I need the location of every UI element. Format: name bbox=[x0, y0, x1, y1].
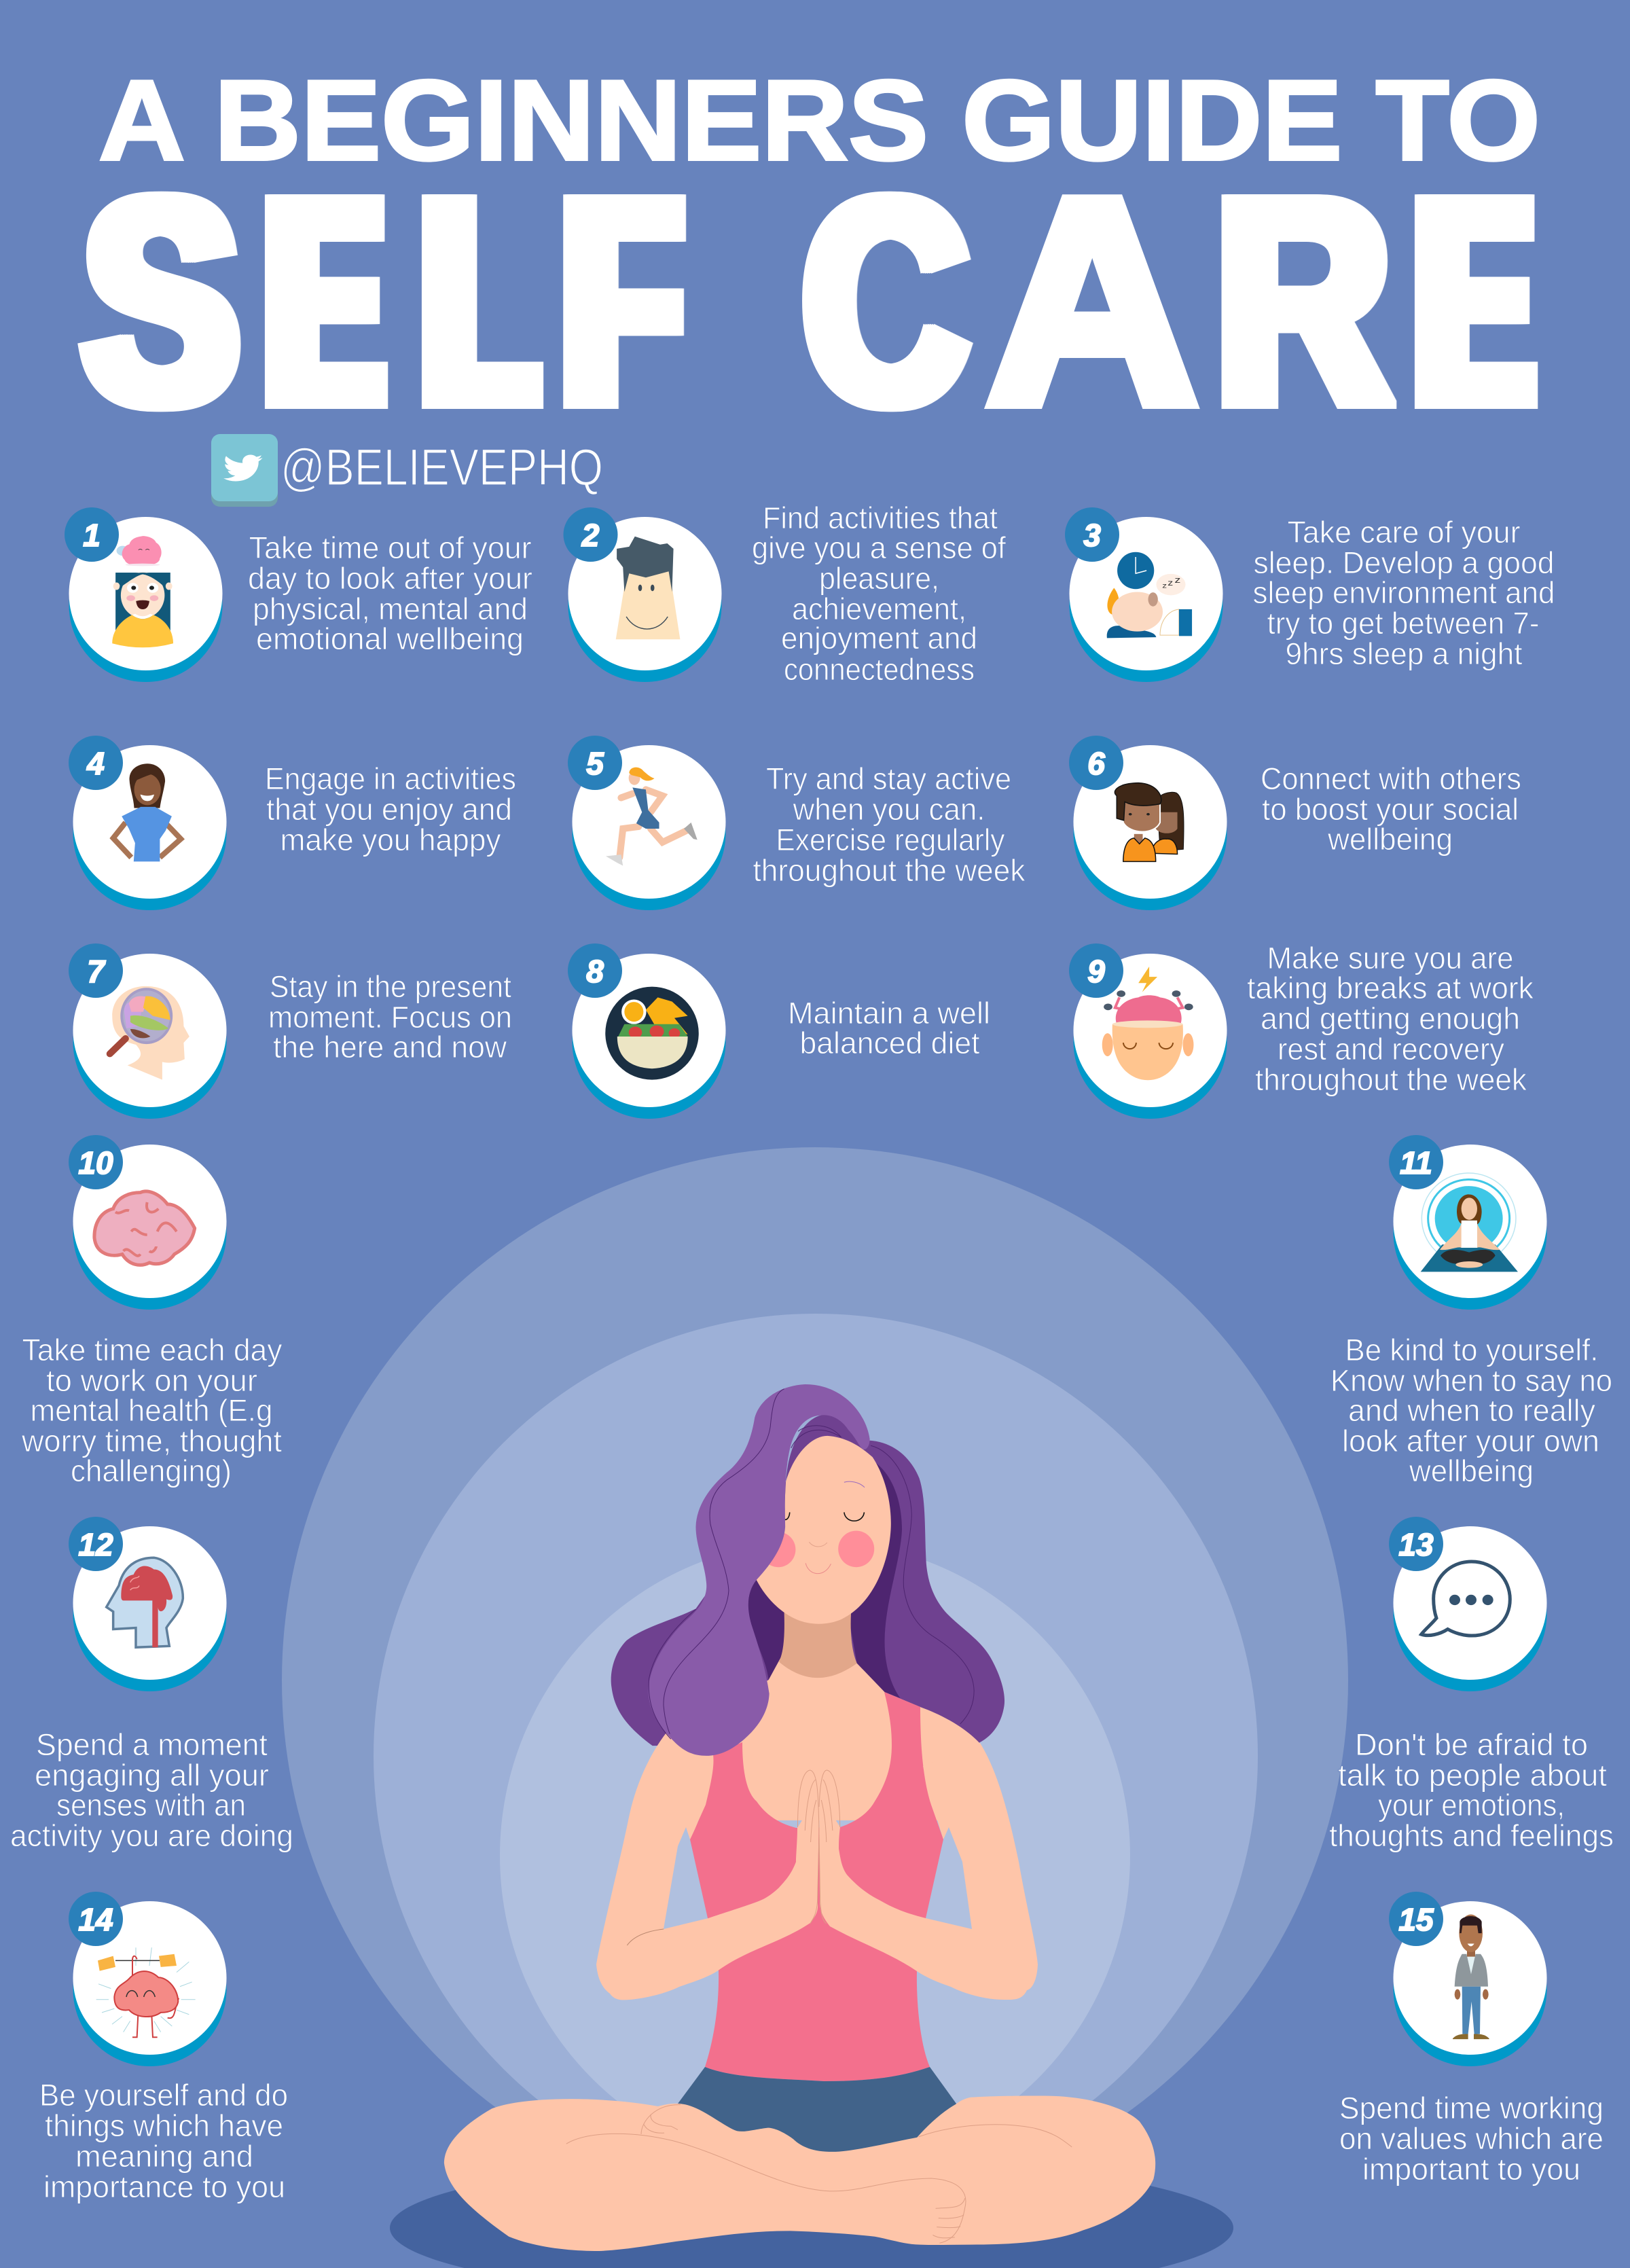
text bbox=[788, 996, 990, 1060]
tip 15 bbox=[1339, 1892, 1604, 2186]
text: Engage in activities bbox=[265, 761, 516, 796]
text: talk to people about bbox=[1338, 1758, 1607, 1793]
text: Take time out of your bbox=[249, 530, 532, 565]
text: and when to really bbox=[1348, 1393, 1595, 1428]
heading: self care: E bbox=[258, 139, 367, 463]
text bbox=[21, 1333, 283, 1488]
text: and getting enough bbox=[1261, 1001, 1520, 1036]
text: that you enjoy and bbox=[266, 792, 512, 827]
icon circle bbox=[69, 517, 223, 682]
badge number 1: 1 bbox=[83, 518, 101, 553]
icon: two friends bbox=[1115, 783, 1184, 861]
background concentric circles bbox=[282, 1147, 1348, 2214]
heading: self care: L bbox=[414, 139, 524, 463]
text: mental health (E.g bbox=[30, 1393, 273, 1428]
heading: self care: E bbox=[1408, 139, 1517, 463]
badge number 14 bbox=[69, 1892, 123, 1946]
icon circle bbox=[73, 1901, 227, 2066]
text: senses with an bbox=[56, 1788, 246, 1822]
tip 3 bbox=[1065, 507, 1555, 682]
icon: runner bbox=[606, 768, 698, 865]
badge number 4 bbox=[69, 736, 123, 790]
tip 6 bbox=[1069, 736, 1521, 910]
tip 4 bbox=[69, 736, 516, 910]
text: make you happy bbox=[280, 823, 501, 857]
icon circle bbox=[568, 517, 721, 682]
badge number 7: 7 bbox=[87, 954, 106, 989]
text bbox=[10, 1727, 293, 1853]
badge number 14: 14 bbox=[78, 1902, 113, 1937]
badge number 7 bbox=[69, 943, 123, 998]
text bbox=[1339, 2091, 1604, 2186]
shorts bbox=[678, 2067, 956, 2160]
badge number 15: 15 bbox=[1398, 1902, 1434, 1937]
icon circle bbox=[1394, 1145, 1547, 1310]
text: physical, mental and bbox=[253, 592, 528, 626]
text: the here and now bbox=[273, 1030, 507, 1064]
text: your emotions, bbox=[1378, 1788, 1565, 1822]
text: give you a sense of bbox=[752, 530, 1006, 565]
icon: speech bubble bbox=[1421, 1562, 1510, 1636]
badge number 3 bbox=[1065, 507, 1119, 562]
text: connectedness bbox=[784, 652, 975, 687]
text: Try and stay active bbox=[766, 761, 1011, 796]
icon: brain lifting weights bbox=[96, 1947, 196, 2037]
text: try to get between 7- bbox=[1267, 606, 1539, 641]
text: Spend time working bbox=[1339, 2091, 1604, 2125]
icon: sleeping person with clock: z bbox=[1175, 575, 1180, 586]
text: rest and recovery bbox=[1278, 1032, 1504, 1066]
badge number 2 bbox=[564, 507, 618, 562]
icon: standing man bbox=[1453, 1914, 1489, 2039]
icon circle bbox=[1073, 745, 1227, 910]
badge number 13: 13 bbox=[1398, 1527, 1434, 1562]
text: thoughts and feelings bbox=[1329, 1818, 1614, 1853]
text: Be yourself and do bbox=[39, 2078, 288, 2112]
right arm bbox=[819, 1743, 1038, 2000]
tip 2 bbox=[564, 501, 1006, 687]
badge number 5 bbox=[568, 736, 622, 790]
icon: meditating figure bbox=[1421, 1173, 1518, 1272]
text: challenging) bbox=[71, 1454, 232, 1488]
icon: girl with brain bbox=[112, 536, 173, 647]
icon: food plate bbox=[605, 987, 699, 1080]
badge number 8 bbox=[568, 943, 622, 998]
text: Spend a moment bbox=[36, 1727, 268, 1762]
text: engaging all your bbox=[35, 1758, 269, 1793]
text: Take care of your bbox=[1288, 515, 1521, 550]
tip 12 bbox=[10, 1517, 293, 1853]
icon circle bbox=[73, 1526, 227, 1691]
text: throughout the week bbox=[753, 853, 1026, 888]
badge number 12: 12 bbox=[78, 1527, 113, 1562]
icon: sleeping person with clock: z bbox=[1167, 579, 1173, 588]
text: emotional wellbeing bbox=[256, 622, 524, 656]
left arm bbox=[596, 1733, 819, 2000]
text: importance to you bbox=[43, 2170, 285, 2204]
text bbox=[753, 761, 1026, 888]
badge number 11 bbox=[1389, 1135, 1443, 1189]
icon: brain bbox=[94, 1191, 195, 1265]
text: day to look after your bbox=[248, 561, 532, 596]
heading: self care bbox=[77, 139, 1538, 463]
text: Know when to say no bbox=[1330, 1363, 1612, 1398]
badge number 6: 6 bbox=[1087, 746, 1105, 781]
text: pleasure, bbox=[819, 561, 939, 596]
badge number 12 bbox=[69, 1517, 123, 1571]
tip 13 bbox=[1329, 1517, 1614, 1853]
tip 9 bbox=[1069, 941, 1534, 1119]
badge number 8: 8 bbox=[586, 954, 604, 989]
badge number 6 bbox=[1069, 736, 1123, 790]
icon: smiling man bbox=[616, 537, 680, 639]
badge number 4: 4 bbox=[86, 746, 105, 781]
text bbox=[268, 969, 512, 1064]
badge number 13 bbox=[1389, 1517, 1443, 1571]
text: sleep environment and bbox=[1252, 575, 1555, 610]
text: taking breaks at work bbox=[1247, 971, 1534, 1005]
text bbox=[752, 501, 1006, 687]
text bbox=[39, 2078, 288, 2204]
tip 11 bbox=[1330, 1135, 1612, 1488]
icon: sleeping person with clock bbox=[1107, 552, 1192, 638]
crossed legs and finger lines bbox=[444, 2095, 1155, 2251]
tip 14 bbox=[39, 1892, 288, 2204]
icon circle bbox=[73, 954, 227, 1119]
text: activity you are doing bbox=[10, 1818, 293, 1853]
front hair bbox=[648, 1384, 870, 1756]
text: to boost your social bbox=[1262, 792, 1519, 827]
pink tank top bbox=[690, 1692, 943, 2081]
text: wellbeing bbox=[1327, 822, 1453, 857]
tip 10 bbox=[21, 1135, 283, 1488]
text: Be kind to yourself. bbox=[1345, 1333, 1599, 1367]
badge number 11: 11 bbox=[1400, 1145, 1432, 1181]
text: Exercise regularly bbox=[776, 823, 1005, 857]
icon: happy woman bbox=[113, 763, 181, 861]
text: important to you bbox=[1362, 2152, 1580, 2186]
icon: head with lifting brain bbox=[1102, 967, 1193, 1080]
text: Take time each day bbox=[22, 1333, 283, 1367]
text: Stay in the present bbox=[270, 969, 511, 1004]
badge number 15 bbox=[1389, 1892, 1443, 1946]
heading: self care: S bbox=[77, 139, 231, 463]
text: things which have bbox=[45, 2108, 283, 2143]
icon: sleeping person with clock: z bbox=[1162, 581, 1167, 590]
tip 8 bbox=[568, 943, 990, 1119]
twitter handle: @BELIEVEPHQ bbox=[280, 439, 603, 497]
text: sleep. Develop a good bbox=[1254, 545, 1554, 580]
hands finger lines bbox=[627, 1770, 840, 1945]
text bbox=[1261, 761, 1521, 857]
icon: twitter badge bbox=[211, 434, 278, 507]
back hair bbox=[611, 1415, 1004, 1746]
icon circle bbox=[73, 745, 227, 910]
text: 9hrs sleep a night bbox=[1285, 636, 1523, 671]
heading: a beginners guide to: A BEGINNERS GUIDE TO bbox=[98, 56, 1540, 184]
text: when you can. bbox=[793, 792, 985, 827]
text: Maintain a well bbox=[788, 996, 990, 1030]
text: moment. Focus on bbox=[268, 1000, 512, 1034]
illustration: meditating woman bbox=[444, 1384, 1155, 2251]
badge number 1 bbox=[65, 507, 119, 562]
text: enjoyment and bbox=[781, 621, 977, 655]
text: meaning and bbox=[75, 2139, 253, 2174]
text: to work on your bbox=[46, 1363, 257, 1398]
tip 5 bbox=[568, 736, 1026, 910]
heading: self care: C bbox=[799, 139, 961, 463]
text bbox=[265, 761, 516, 857]
tip 1 bbox=[65, 507, 532, 682]
icon circle bbox=[572, 954, 725, 1119]
icon circle bbox=[73, 1145, 227, 1310]
badge number 10 bbox=[69, 1135, 123, 1189]
text bbox=[1247, 941, 1534, 1097]
icon circle bbox=[572, 745, 725, 910]
text: balanced diet bbox=[800, 1026, 980, 1060]
text: wellbeing bbox=[1409, 1454, 1534, 1488]
badge number 10: 10 bbox=[78, 1145, 113, 1181]
text: Don't be afraid to bbox=[1355, 1727, 1588, 1762]
text: worry time, thought bbox=[21, 1424, 282, 1458]
text: Connect with others bbox=[1261, 761, 1521, 796]
badge number 9 bbox=[1069, 943, 1123, 998]
text bbox=[248, 530, 532, 656]
heading: self care: R bbox=[1212, 139, 1384, 463]
text: look after your own bbox=[1342, 1424, 1599, 1458]
text: Find activities that bbox=[763, 501, 998, 535]
icon circle bbox=[1069, 517, 1222, 682]
neck and face bbox=[648, 1384, 891, 1756]
text bbox=[1330, 1333, 1612, 1488]
tip 7 bbox=[69, 943, 512, 1119]
icon circle bbox=[1394, 1901, 1547, 2066]
text: Make sure you are bbox=[1267, 941, 1513, 975]
heading: self care: F bbox=[556, 139, 669, 463]
badge number 2: 2 bbox=[581, 518, 600, 553]
heading: self care: A bbox=[988, 139, 1197, 463]
text: throughout the week bbox=[1255, 1062, 1527, 1097]
icon circle bbox=[1394, 1526, 1547, 1691]
floor shadow bbox=[390, 2157, 1233, 2268]
text bbox=[1329, 1727, 1614, 1853]
icon: head with red brain bbox=[107, 1558, 183, 1647]
icon: head with magnifier bbox=[110, 986, 189, 1080]
text: on values which are bbox=[1339, 2121, 1604, 2156]
badge number 5: 5 bbox=[586, 746, 604, 781]
torso skin bbox=[647, 1648, 990, 1820]
text: achievement, bbox=[792, 592, 966, 626]
icon circle bbox=[1073, 954, 1227, 1119]
badge number 9: 9 bbox=[1087, 954, 1105, 989]
badge number 3: 3 bbox=[1083, 518, 1101, 553]
text bbox=[1252, 515, 1555, 671]
